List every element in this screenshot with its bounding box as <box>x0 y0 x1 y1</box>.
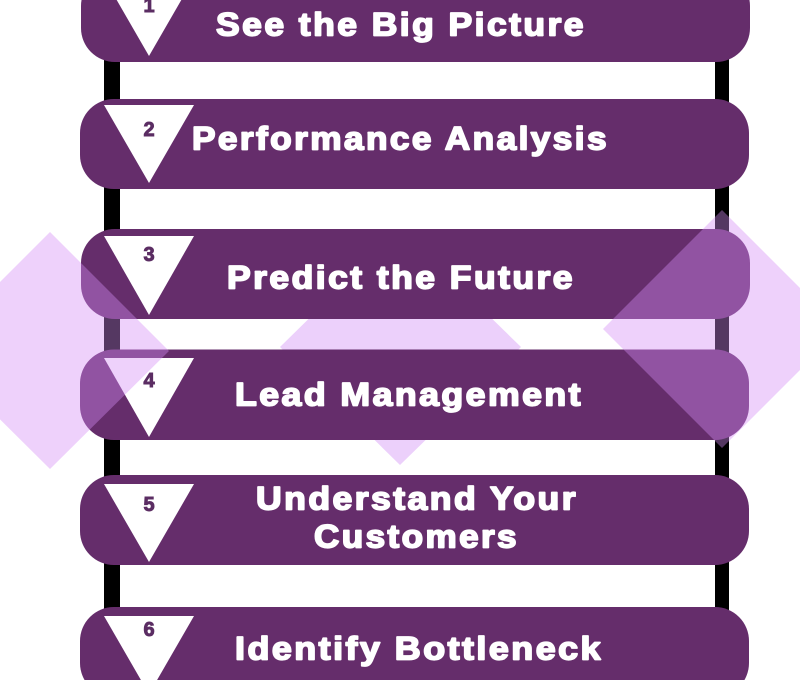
diamond: left overlay <box>0 232 169 469</box>
step 1: See the Big Picture <box>216 6 586 42</box>
step 6: 6 <box>143 619 155 641</box>
step 3 <box>81 229 750 319</box>
left vertical line <box>104 0 120 680</box>
step 4: 4 <box>143 370 155 392</box>
step 1 <box>81 0 750 62</box>
step 2 <box>80 99 749 189</box>
step 5: Customers <box>314 518 519 554</box>
step 2: 2 <box>143 119 155 141</box>
step 3: Predict the Future <box>227 260 575 296</box>
diamond: right overlay <box>603 210 800 448</box>
step 5 <box>80 475 749 565</box>
step 3: 3 <box>143 244 155 266</box>
step 5: 5 <box>143 494 155 516</box>
right vertical line <box>715 0 729 680</box>
step 6: Identify Bottleneck <box>235 630 603 666</box>
step 2: Performance Analysis <box>192 120 609 156</box>
step 5: Understand Your <box>256 480 578 516</box>
step 4: Lead Management <box>235 376 583 412</box>
diamond: centre background <box>280 229 521 465</box>
step 4 <box>80 350 749 440</box>
step 6 <box>80 607 749 680</box>
